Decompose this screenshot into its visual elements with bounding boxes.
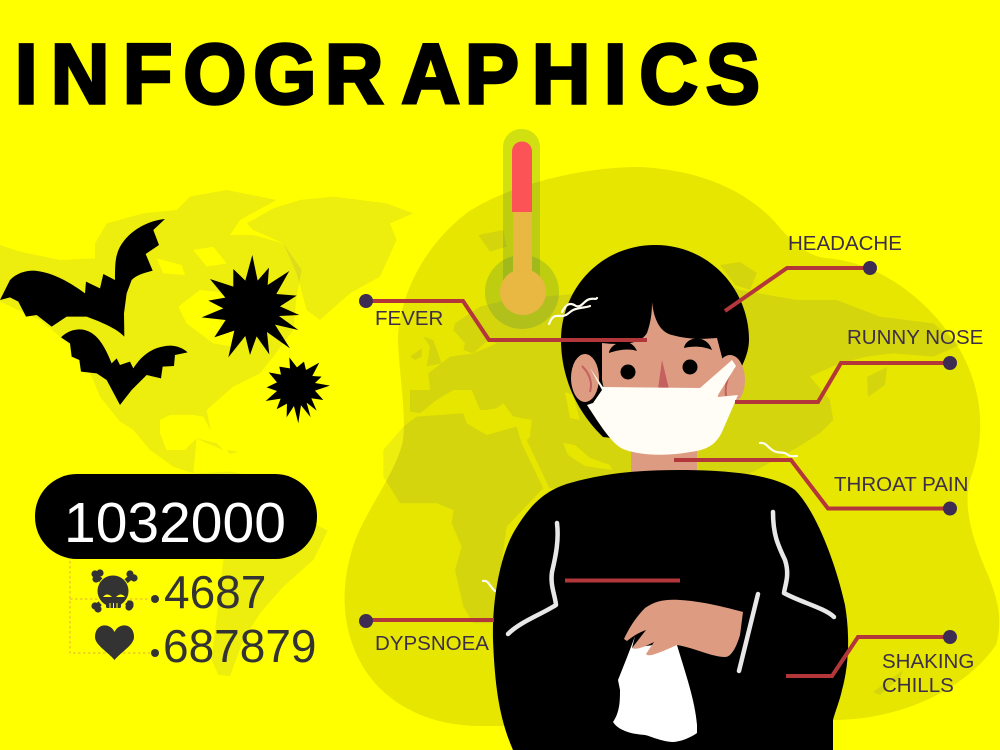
callout: fever: FEVER: [375, 307, 443, 330]
callout: shaking chills: CHILLS: [882, 674, 954, 697]
map: new zealand: [873, 670, 903, 695]
background blob: [345, 167, 999, 726]
face: [602, 302, 724, 420]
map: south america: [193, 472, 328, 676]
arm fold line: [739, 594, 758, 671]
icon: bats: [0, 219, 188, 405]
callout: runny nose: [735, 326, 983, 402]
icon: small bat: [61, 329, 188, 405]
sweat squiggle throat: [760, 443, 797, 456]
stat: deaths: 4687: [164, 566, 266, 618]
total count pill: [35, 474, 317, 559]
map: northern islands: [720, 262, 887, 397]
connector dotted lines: [70, 556, 150, 653]
face mask: [587, 360, 738, 455]
callout: shaking chills: [786, 630, 974, 697]
stat: recovered: 687879: [163, 620, 316, 672]
right sleeve line: [773, 512, 834, 617]
callout: throat pain: [674, 460, 968, 516]
torso: [493, 470, 848, 750]
world map: [0, 190, 960, 695]
callout: throat pain: THROAT PAIN: [834, 473, 968, 496]
sweat squiggle chest: [483, 581, 495, 591]
neck: [631, 440, 697, 480]
callout: headache: HEADACHE: [788, 232, 902, 255]
person: [483, 245, 848, 750]
sweat squiggles forehead: [549, 298, 597, 324]
callout: headache: [725, 232, 902, 311]
callout: runny nose: RUNNY NOSE: [847, 326, 983, 349]
icon: heart: [95, 625, 134, 660]
chest line: [565, 578, 680, 582]
callout: dypsnoea: [359, 614, 494, 655]
hair: [561, 245, 749, 440]
callout: dypsnoea: DYPSNOEA: [375, 632, 489, 655]
map: north america: [0, 190, 413, 473]
left sleeve line: [508, 523, 558, 634]
left ear: [571, 354, 599, 402]
callout: fever: [359, 294, 647, 340]
icon: virus large: [202, 255, 299, 357]
icon: virus small: [266, 357, 330, 423]
tissue: [613, 636, 697, 742]
hand and forearm: [624, 600, 743, 657]
icon: skull and crossbones: [91, 569, 138, 613]
total count pill: 1032000: [64, 491, 286, 555]
right ear: [715, 355, 745, 405]
map: inland seas: [563, 392, 612, 470]
title: INFOGRAPHICS: [15, 28, 760, 121]
eyes: [620, 360, 698, 380]
icon: thermometer: [485, 129, 559, 329]
nose: [658, 360, 669, 389]
map: africa europe and asia: [383, 230, 960, 623]
eyebrows: [609, 338, 712, 353]
icon: large bat: [0, 219, 165, 337]
callout: shaking chills: SHAKING: [882, 650, 974, 673]
